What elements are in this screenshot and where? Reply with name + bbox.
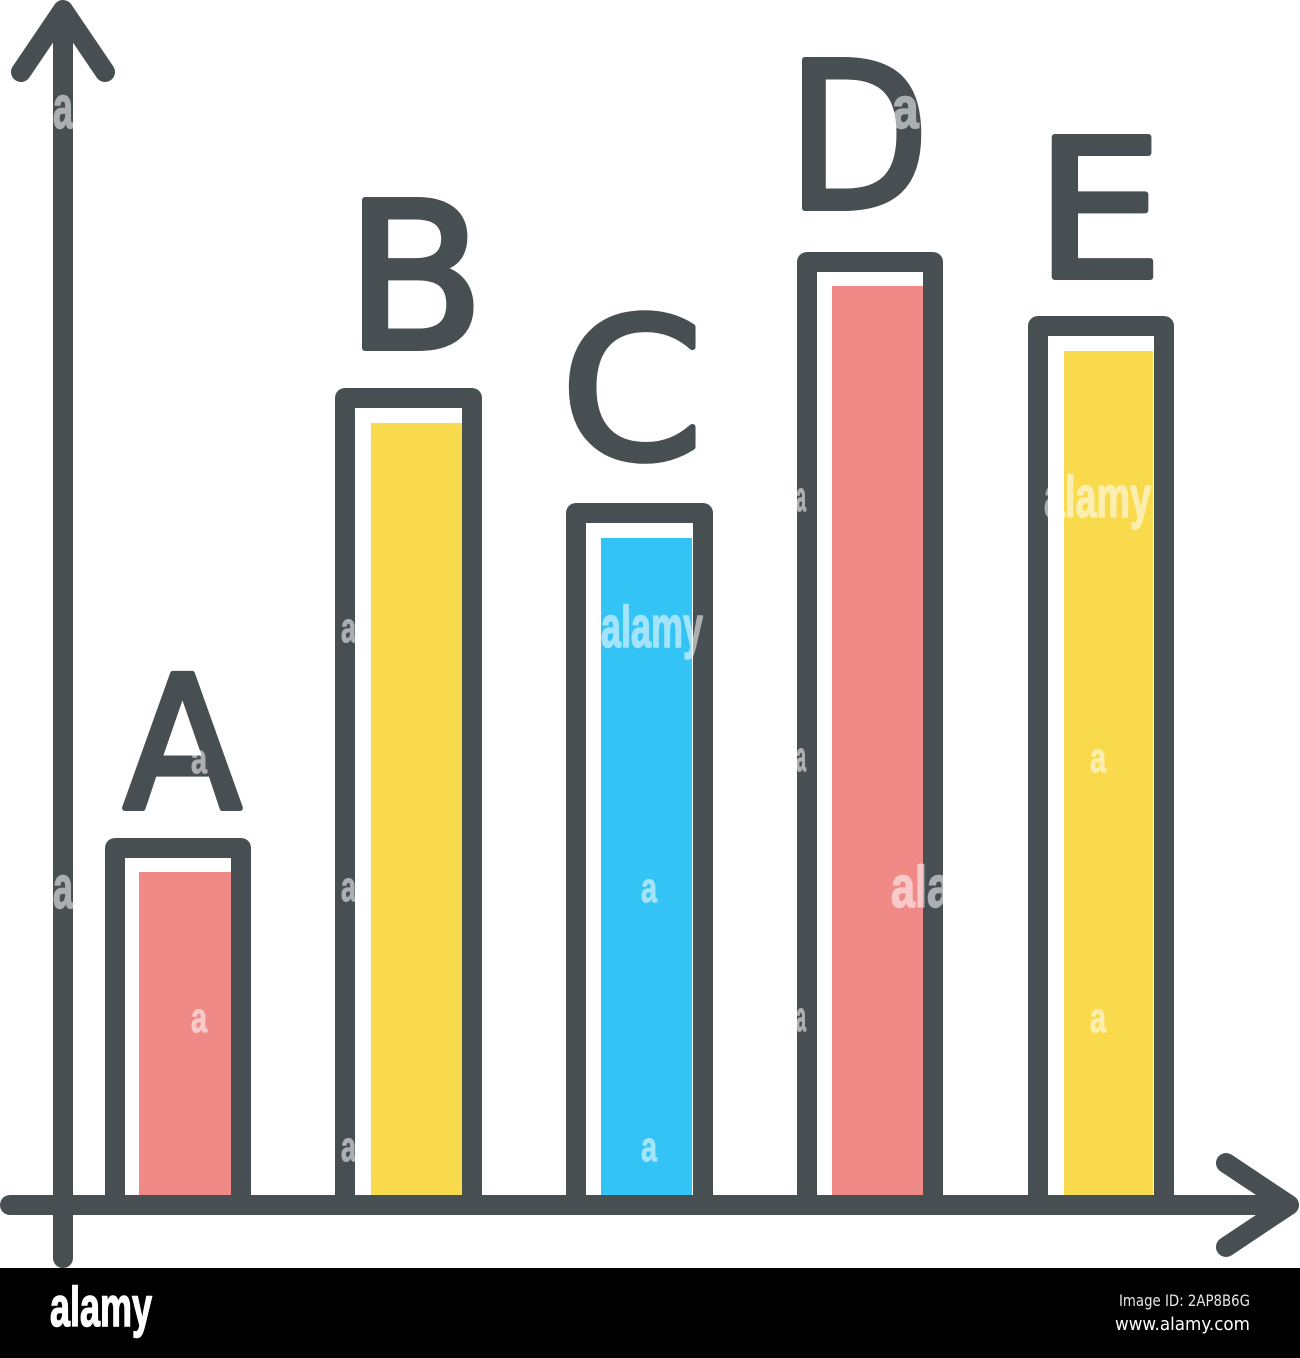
bar A bbox=[115, 848, 241, 1205]
watermarks: a bbox=[341, 604, 356, 651]
watermarks: alamy bbox=[601, 595, 703, 660]
watermarks: a bbox=[1090, 994, 1106, 1041]
website: www.alamy.com bbox=[1115, 1314, 1250, 1335]
bar D bbox=[807, 262, 933, 1205]
watermarks: alamy bbox=[1044, 465, 1151, 530]
watermarks: a bbox=[53, 74, 73, 141]
image id: Image ID: 2AP8B6G bbox=[1119, 1291, 1250, 1310]
watermarks: a bbox=[191, 994, 207, 1041]
watermarks: a bbox=[341, 863, 356, 910]
watermarks: a bbox=[191, 735, 207, 782]
watermarks: al bbox=[892, 76, 932, 141]
bar C bbox=[576, 513, 703, 1205]
watermarks: a bbox=[53, 854, 73, 921]
watermarks: a bbox=[796, 993, 806, 1040]
label A: A bbox=[124, 638, 242, 852]
footer logo: alamy bbox=[50, 1275, 152, 1338]
vertical axis arrow bbox=[21, 10, 105, 1258]
watermarks: a bbox=[1090, 734, 1106, 781]
watermarks: a bbox=[641, 1123, 657, 1170]
label D: D bbox=[786, 20, 930, 256]
watermarks: a bbox=[796, 473, 806, 520]
watermarks: a bbox=[796, 733, 806, 780]
watermarks bbox=[53, 74, 1151, 1170]
horizontal axis arrow bbox=[10, 1163, 1289, 1247]
label C: C bbox=[560, 277, 704, 504]
label B: B bbox=[345, 160, 485, 396]
watermarks: a bbox=[641, 864, 657, 911]
watermarks: a bbox=[341, 1123, 356, 1170]
bar B bbox=[345, 398, 472, 1205]
bar E bbox=[1038, 326, 1164, 1205]
watermarks: ala bbox=[891, 855, 952, 920]
label E: E bbox=[1035, 100, 1163, 323]
footer bar bbox=[0, 1268, 1300, 1358]
